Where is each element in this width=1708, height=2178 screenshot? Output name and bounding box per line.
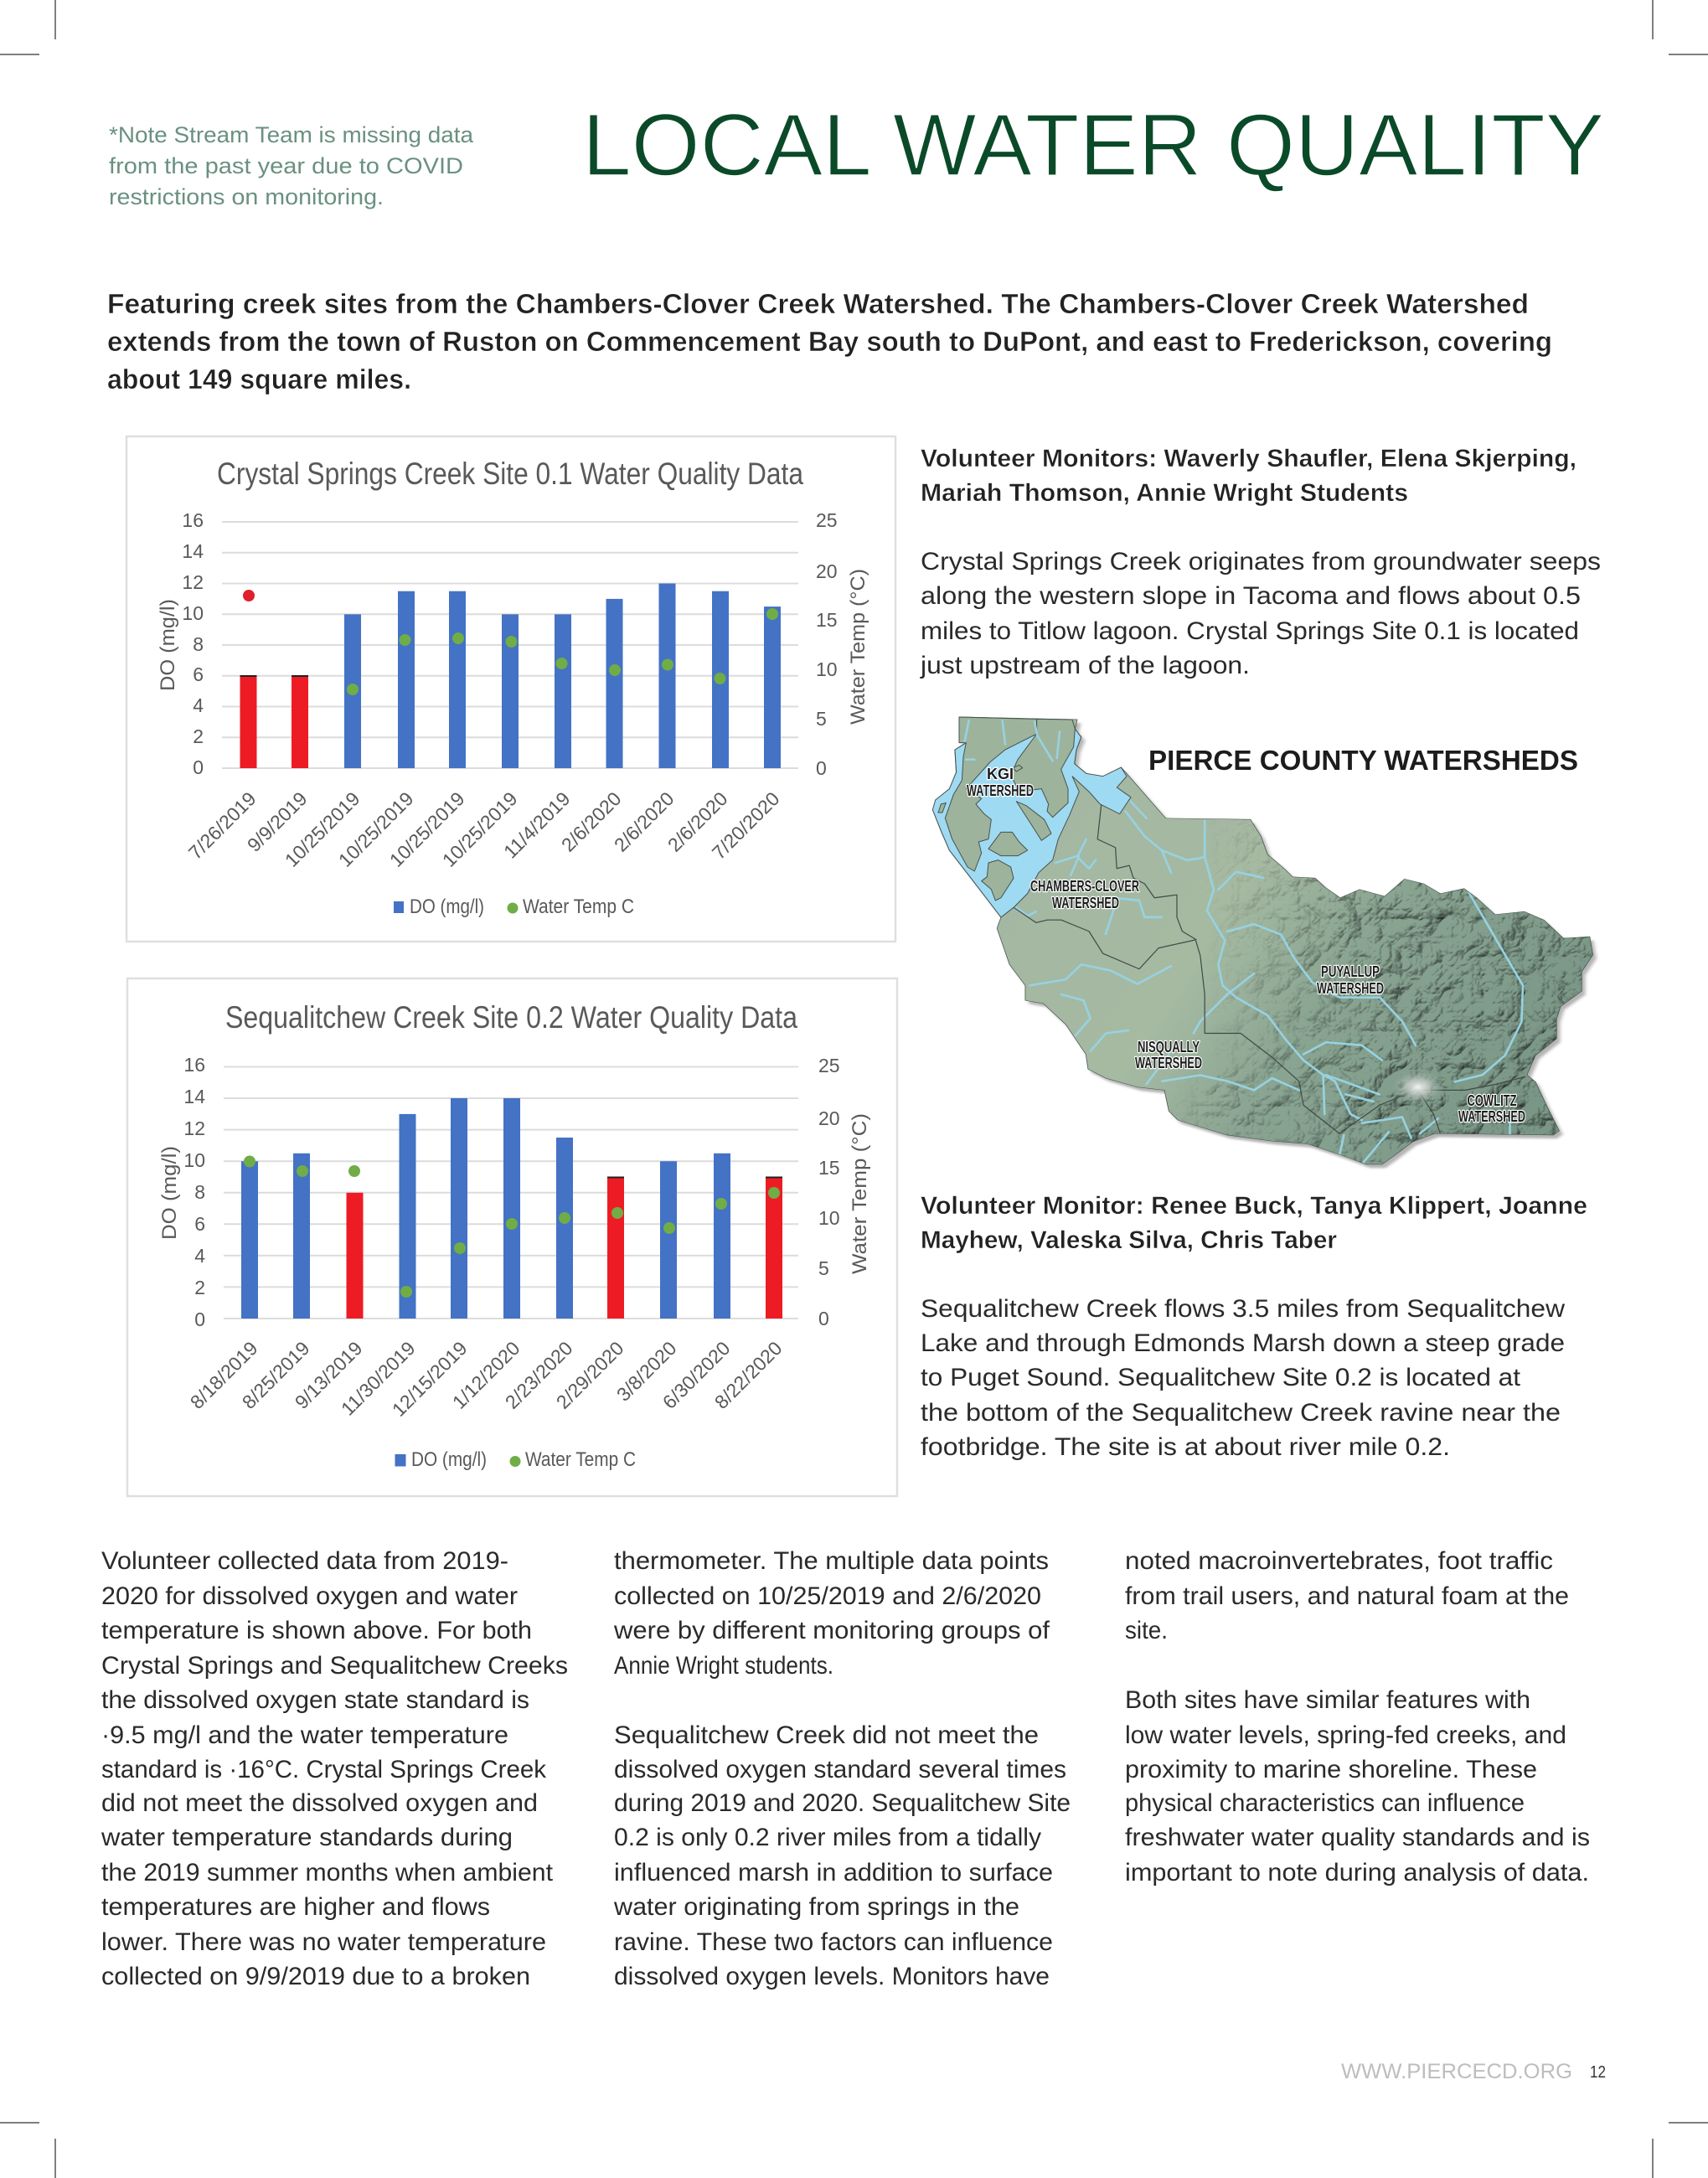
right axis numbers: 15 (816, 609, 838, 631)
lead paragraph: extends from the town of Ruston on Commencement Bay south to DuPont, and east to Frederickson, covering (107, 326, 1552, 357)
water temperature dots (243, 590, 778, 695)
text column 3: from trail users, and natural foam at the (1125, 1582, 1569, 1610)
text column 1: water temperature standards during (101, 1824, 513, 1851)
right axis numbers: 25 (818, 1055, 840, 1076)
text column 3: site. (1125, 1617, 1168, 1644)
text: Sequalitchew description (921, 1295, 1565, 1461)
map label: Puyallup: PUYALLUP (1321, 963, 1380, 980)
chart title: Sequalitchew Creek Site 0.2 Water Quality Data (225, 1000, 797, 1035)
map label: KGI: WATERSHED (967, 782, 1034, 799)
left axis numbers: 2 (193, 725, 204, 747)
map label: Chambers-Clover: CHAMBERS-CLOVER (1030, 878, 1139, 895)
date labels: 10/25/2019 (385, 787, 469, 871)
text column 2: Sequalitchew Creek did not meet the (614, 1721, 1039, 1749)
text column 2: dissolved oxygen standard several times (614, 1756, 1066, 1783)
text column 2: Annie Wright students. (614, 1652, 833, 1680)
left axis numbers (183, 1054, 205, 1330)
text column 1: standard is ·16°C. Crystal Springs Creek (101, 1756, 547, 1783)
note about missing data: restrictions on monitoring. (109, 184, 384, 209)
text: Sequalitchew volunteer monitors (921, 1192, 1587, 1254)
map label: Cowlitz (1458, 1092, 1525, 1125)
date labels: 12/15/2019 (388, 1337, 472, 1421)
left axis numbers: 6 (193, 663, 204, 685)
text column 1 (101, 1547, 568, 1990)
date labels: 2/6/2020 (557, 787, 626, 856)
footer website: WWW.PIERCECD.ORG (1341, 2060, 1572, 2083)
watershed borders (1014, 803, 1525, 1133)
text column 1: temperature is shown above. For both (101, 1617, 532, 1644)
date labels (186, 1337, 787, 1421)
right axis numbers: 20 (816, 560, 838, 582)
map label: Chambers-Clover (1030, 878, 1139, 911)
text column 3: physical characteristics can influence (1125, 1789, 1525, 1817)
map label: Puyallup: WATERSHED (1317, 980, 1384, 997)
text column 1: the dissolved oxygen state standard is (101, 1686, 529, 1714)
date labels: 6/30/2020 (658, 1337, 735, 1413)
left axis numbers: 0 (193, 756, 204, 778)
text column 2: dissolved oxygen levels. Monitors have (614, 1963, 1050, 1990)
left axis numbers: 2 (194, 1277, 205, 1298)
left axis numbers: 12 (183, 1117, 205, 1139)
text column 1: did not meet the dissolved oxygen and (101, 1789, 538, 1817)
water temperature dots (244, 1156, 780, 1298)
map label: Chambers-Clover: WATERSHED (1052, 895, 1119, 911)
page number: 12 (1590, 2063, 1606, 2082)
left axis title: DO (mg/l) (157, 599, 179, 691)
map label: KGI: KGI (987, 766, 1014, 782)
lead paragraph: about 149 square miles. (107, 364, 411, 395)
left axis numbers (182, 509, 204, 778)
text column 3: important to note during analysis of data. (1125, 1859, 1589, 1886)
text column 3: Both sites have similar features with (1125, 1686, 1530, 1714)
map label: Nisqually (1135, 1039, 1202, 1071)
text: Sequalitchew description: the bottom of the Sequalitchew Creek ravine near the (921, 1399, 1561, 1427)
text column 1: the 2019 summer months when ambient (101, 1859, 554, 1886)
date labels (184, 787, 784, 871)
legend (395, 1448, 636, 1471)
left axis title: DO (mg/l) (158, 1146, 181, 1240)
map label: Puyallup (1317, 963, 1384, 997)
date labels: 2/29/2020 (552, 1337, 628, 1413)
text column 3: freshwater water quality standards and is (1125, 1824, 1590, 1851)
right axis numbers: 5 (816, 708, 827, 730)
text column 1: Crystal Springs and Sequalitchew Creeks (101, 1652, 568, 1680)
text: Crystal Springs volunteer monitors: Volunteer Monitors: Waverly Shaufler, Elena Skjerping, (921, 445, 1576, 472)
date labels: 2/6/2020 (610, 787, 679, 856)
DO bars (241, 1098, 782, 1319)
map label: Nisqually: NISQUALLY (1138, 1039, 1200, 1055)
date labels: 1/12/2020 (448, 1337, 524, 1413)
water and islands: Puget Sound (932, 717, 1131, 917)
date labels: 8/25/2019 (238, 1337, 314, 1413)
left axis numbers: 16 (183, 1054, 205, 1076)
text column 2 (613, 1547, 1071, 1990)
right axis numbers: 5 (818, 1257, 829, 1279)
date labels: 9/9/2019 (243, 787, 312, 856)
map label: KGI (967, 766, 1034, 799)
text column 2: influenced marsh in addition to surface (614, 1859, 1053, 1886)
left axis numbers: 10 (182, 602, 204, 624)
right axis numbers: 0 (816, 757, 827, 779)
date labels: 10/25/2019 (281, 787, 364, 871)
DO bars (240, 583, 781, 768)
text: Crystal Springs description (920, 548, 1601, 679)
text column 1: lower. There was no water temperature (101, 1928, 546, 1956)
right axis numbers: 15 (818, 1157, 840, 1179)
map: Pierce County watersheds (913, 695, 1617, 1168)
legend: Water Temp C (525, 1448, 636, 1471)
text: Sequalitchew volunteer monitors: Volunteer Monitor: Renee Buck, Tanya Klippert, Joanne (921, 1192, 1587, 1220)
text column 1: ·9.5 mg/l and the water temperature (101, 1721, 508, 1749)
right axis title: Water Temp (°C) (847, 569, 869, 725)
date labels: 11/30/2019 (337, 1337, 420, 1420)
text: Crystal Springs description: along the western slope in Tacoma and flows about 0.5 (921, 582, 1581, 610)
text column 2: thermometer. The multiple data points (614, 1547, 1049, 1575)
legend (394, 895, 634, 918)
date labels: 2/6/2020 (663, 787, 732, 856)
text: Crystal Springs volunteer monitors: Mariah Thomson, Annie Wright Students (921, 479, 1408, 507)
date labels: 2/23/2020 (501, 1337, 577, 1413)
note about missing data (109, 122, 474, 209)
date labels: 11/4/2019 (499, 787, 575, 863)
text: Crystal Springs volunteer monitors (921, 445, 1576, 507)
left axis numbers: 14 (183, 1086, 205, 1107)
right axis numbers: 0 (818, 1308, 829, 1329)
left axis numbers: 10 (183, 1149, 205, 1171)
text: Sequalitchew description: to Puget Sound. Sequalitchew Site 0.2 is located at (921, 1364, 1521, 1391)
text: Sequalitchew volunteer monitors: Mayhew, Valeska Silva, Chris Taber (921, 1226, 1337, 1254)
text: Crystal Springs description: Crystal Springs Creek originates from groundwater seeps (921, 548, 1601, 575)
left axis numbers: 8 (194, 1181, 205, 1203)
rivers (1015, 800, 1525, 1164)
text column 2: were by different monitoring groups of (613, 1617, 1050, 1644)
text column 2: collected on 10/25/2019 and 2/6/2020 (614, 1582, 1041, 1610)
panel: Sequalitchew chart (127, 978, 897, 1496)
right axis title: Water Temp (°C) (849, 1113, 871, 1274)
left axis numbers: 0 (194, 1308, 205, 1330)
date labels: 8/22/2020 (710, 1337, 787, 1413)
text column 2: water originating from springs in the (613, 1893, 1019, 1921)
date labels: 9/13/2019 (291, 1337, 367, 1413)
text: Crystal Springs description: miles to Titlow lagoon. Crystal Springs Site 0.1 is located (921, 617, 1579, 645)
text column 3: proximity to marine shoreline. These (1125, 1756, 1537, 1783)
right axis numbers: 10 (818, 1207, 840, 1229)
title: LOCAL WATER QUALITY (582, 96, 1604, 194)
text column 1: 2020 for dissolved oxygen and water (101, 1582, 518, 1610)
map label: Nisqually: WATERSHED (1135, 1055, 1202, 1071)
right axis numbers: 20 (818, 1107, 840, 1129)
date labels: 3/8/2020 (612, 1337, 681, 1406)
text column 3: low water levels, spring-fed creeks, and (1125, 1721, 1566, 1749)
text: Sequalitchew description: Lake and through Edmonds Marsh down a steep grade (921, 1329, 1565, 1357)
panel: Crystal Springs chart (126, 436, 895, 942)
left axis numbers: 8 (193, 633, 204, 655)
date labels: 10/25/2019 (334, 787, 418, 871)
note about missing data: from the past year due to COVID (109, 153, 463, 178)
note about missing data: *Note Stream Team is missing data (109, 122, 474, 147)
text column 3 (1125, 1547, 1590, 1886)
right axis numbers: 25 (816, 509, 838, 531)
map label: Cowlitz: COWLITZ (1468, 1092, 1516, 1109)
text column 2: ravine. These two factors can influence (614, 1928, 1053, 1956)
text column 3: noted macroinvertebrates, foot traffic (1125, 1547, 1553, 1575)
left axis numbers: 6 (194, 1213, 205, 1235)
left axis numbers: 16 (182, 509, 204, 531)
text column 2: 0.2 is only 0.2 river miles from a tidally (614, 1824, 1041, 1851)
lead paragraph (107, 288, 1552, 395)
legend: DO (mg/l) (411, 1448, 487, 1471)
right axis numbers (818, 1055, 840, 1329)
map label: Cowlitz: WATERSHED (1458, 1108, 1525, 1125)
text column 1: temperatures are higher and flows (101, 1893, 490, 1921)
text: Crystal Springs description: just upstream of the lagoon. (920, 652, 1250, 679)
text: Sequalitchew description: Sequalitchew Creek flows 3.5 miles from Sequalitchew (921, 1295, 1565, 1323)
left axis numbers: 4 (194, 1245, 205, 1267)
date labels: 7/20/2020 (708, 787, 784, 864)
text: Sequalitchew description: footbridge. The site is at about river mile 0.2. (921, 1433, 1450, 1461)
date labels: 8/18/2019 (186, 1337, 262, 1413)
text column 1: Volunteer collected data from 2019- (101, 1547, 508, 1575)
right axis numbers (816, 509, 838, 779)
lead paragraph: Featuring creek sites from the Chambers-Clover Creek Watershed. The Chambers-Clover Creek Watershed (107, 288, 1529, 319)
legend: Water Temp C (523, 895, 634, 918)
map heading: PIERCE COUNTY WATERSHEDS (1148, 745, 1578, 776)
text column 1: collected on 9/9/2019 due to a broken (101, 1963, 530, 1990)
left axis numbers: 4 (193, 694, 204, 716)
left axis numbers: 12 (182, 571, 204, 593)
chart title: Crystal Springs Creek Site 0.1 Water Quality Data (217, 457, 803, 491)
right axis numbers: 10 (816, 658, 838, 680)
legend: DO (mg/l) (410, 895, 484, 918)
text column 2: during 2019 and 2020. Sequalitchew Site (614, 1789, 1071, 1817)
left axis numbers: 14 (182, 540, 204, 562)
date labels: 10/25/2019 (438, 787, 522, 871)
date labels: 7/26/2019 (184, 787, 261, 864)
